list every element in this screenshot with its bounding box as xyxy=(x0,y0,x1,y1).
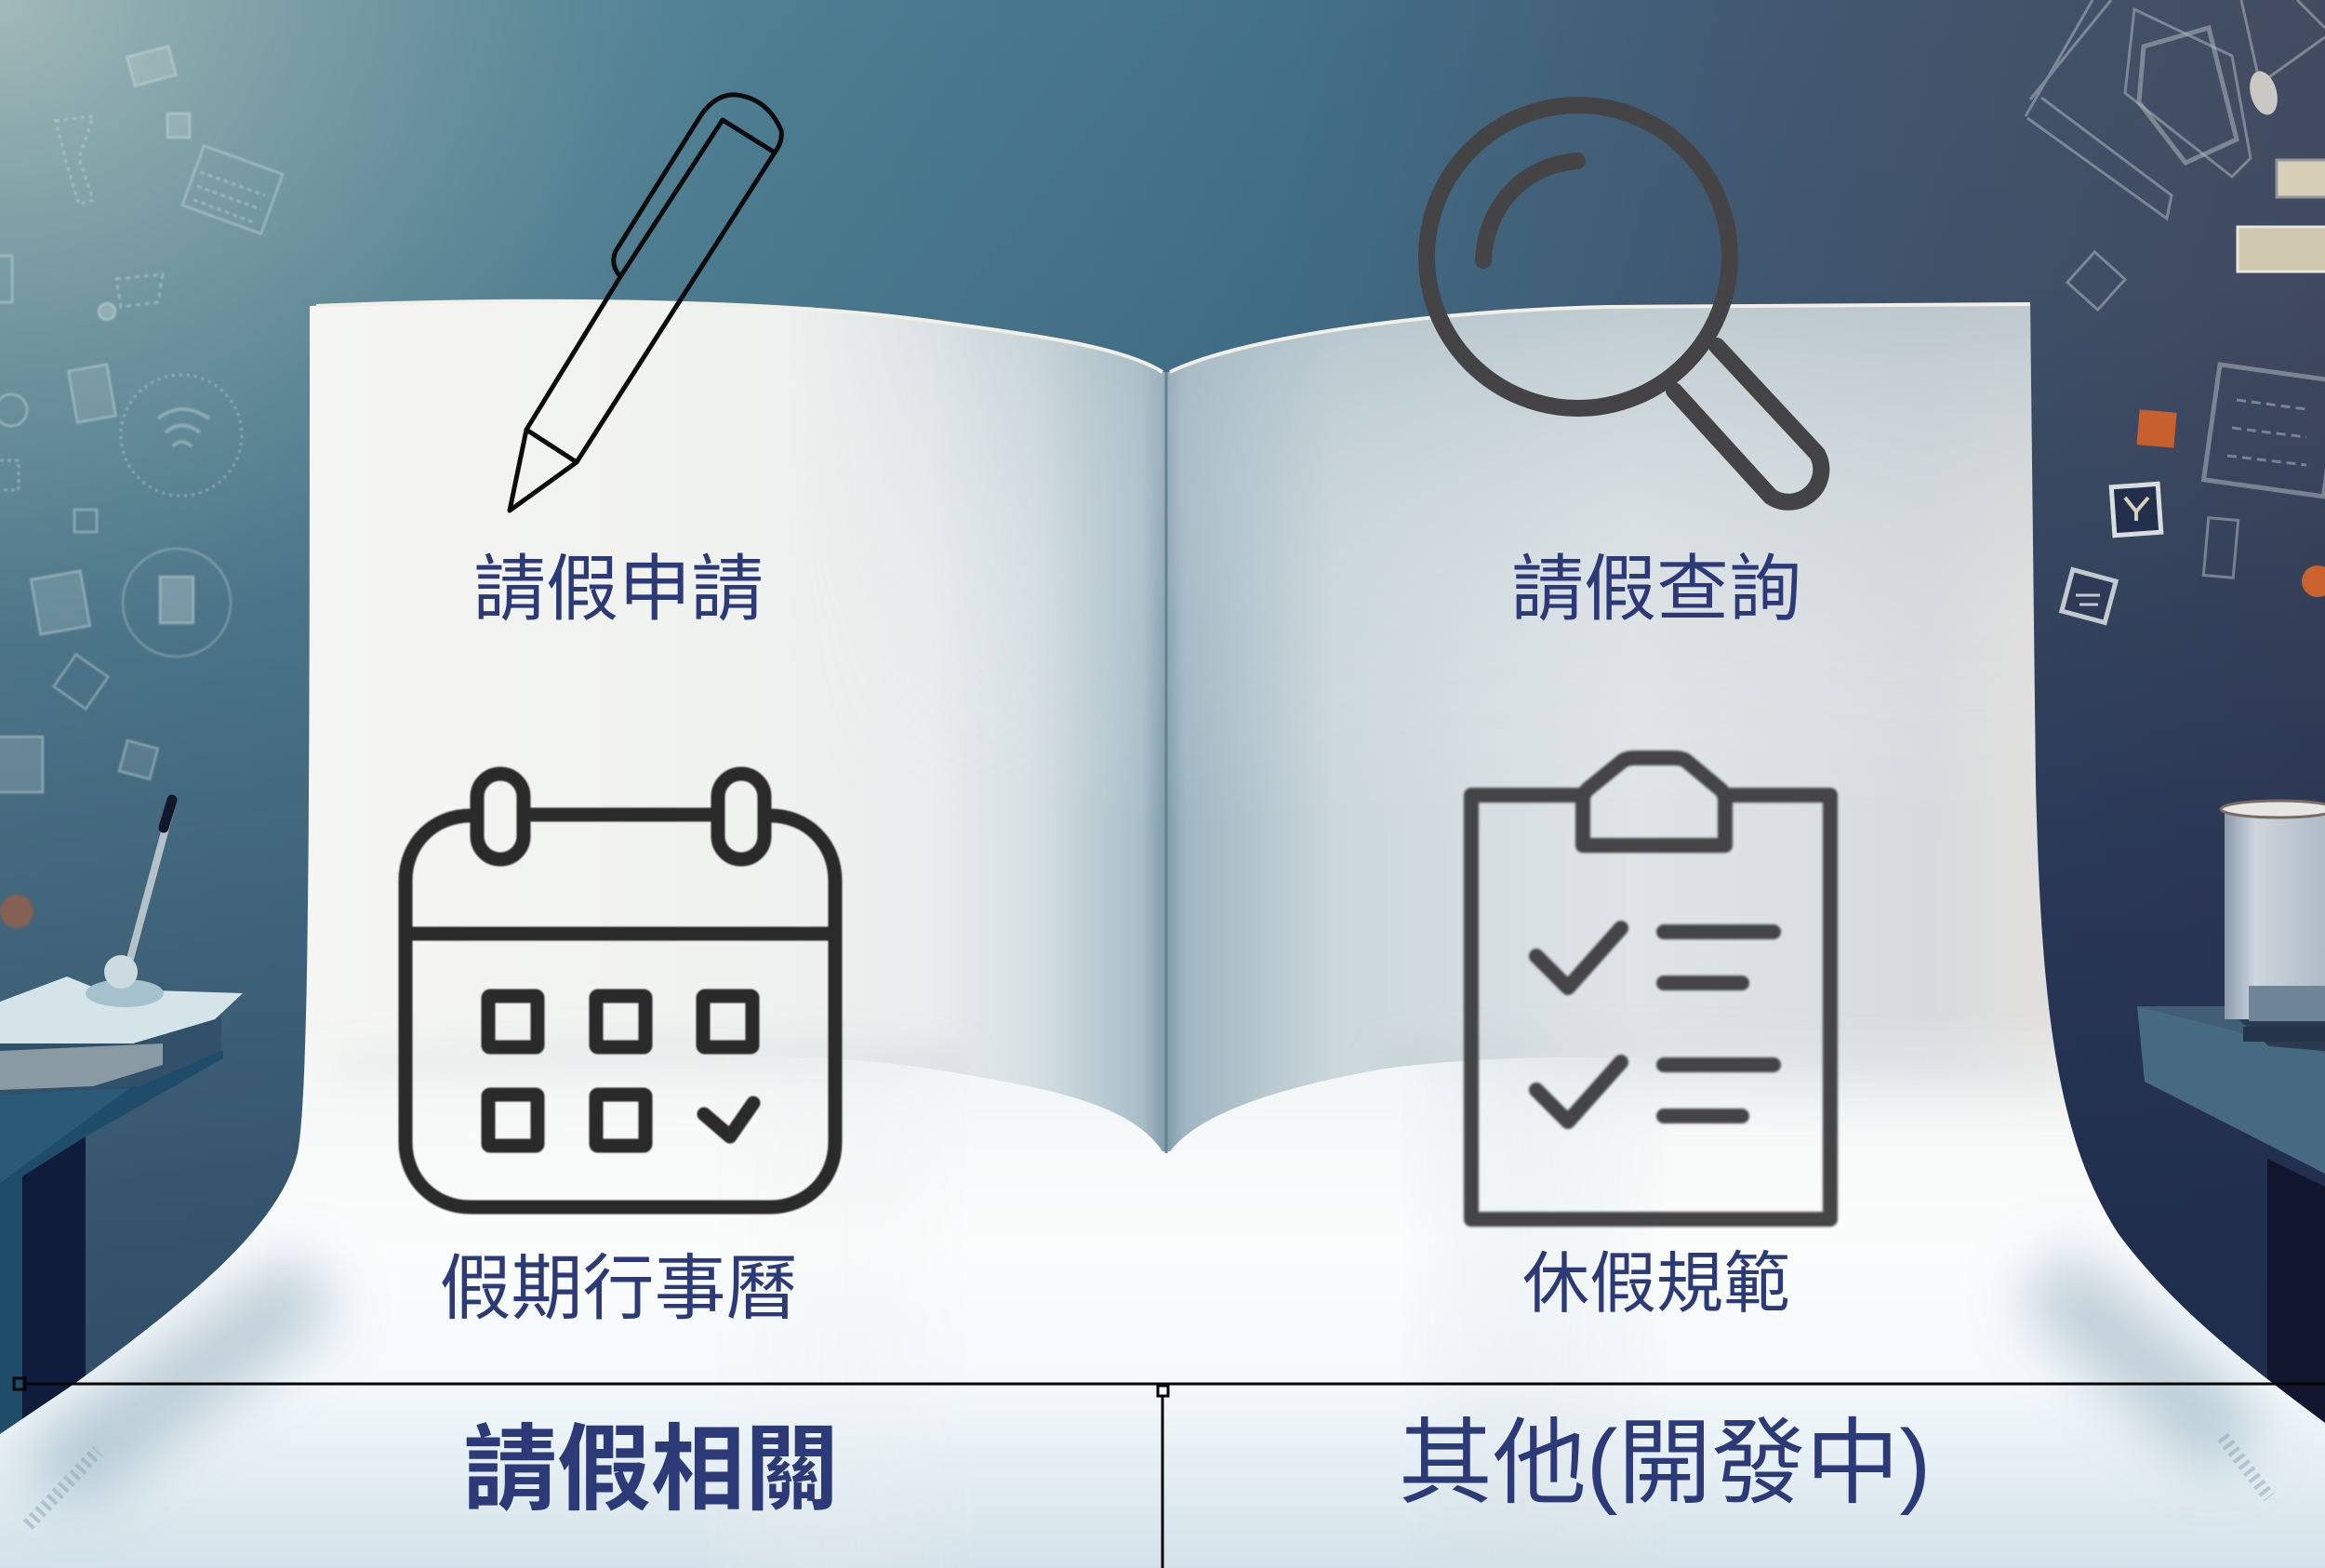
label: leave query: 請假查詢 xyxy=(1511,548,1801,630)
heading: other, in development: 其他(開發中) xyxy=(1399,1412,1931,1516)
icon: calendar xyxy=(405,774,835,1207)
heading: leave related: 請假相關 xyxy=(463,1418,839,1522)
left desk xyxy=(0,800,243,1469)
icon: magnifying glass xyxy=(1427,105,1821,502)
right desk xyxy=(2137,801,2325,1432)
label: leave rules: 休假規範 xyxy=(1522,1247,1790,1322)
label: holiday calendar: 假期行事曆 xyxy=(439,1249,798,1329)
icon: clipboard checklist xyxy=(1471,758,1830,1219)
icon: pen xyxy=(510,95,781,511)
table divider lines xyxy=(14,1378,2325,1568)
label: leave application: 請假申請 xyxy=(473,548,764,630)
right wall sketches xyxy=(2026,0,2325,622)
left wall sketches xyxy=(0,47,283,792)
